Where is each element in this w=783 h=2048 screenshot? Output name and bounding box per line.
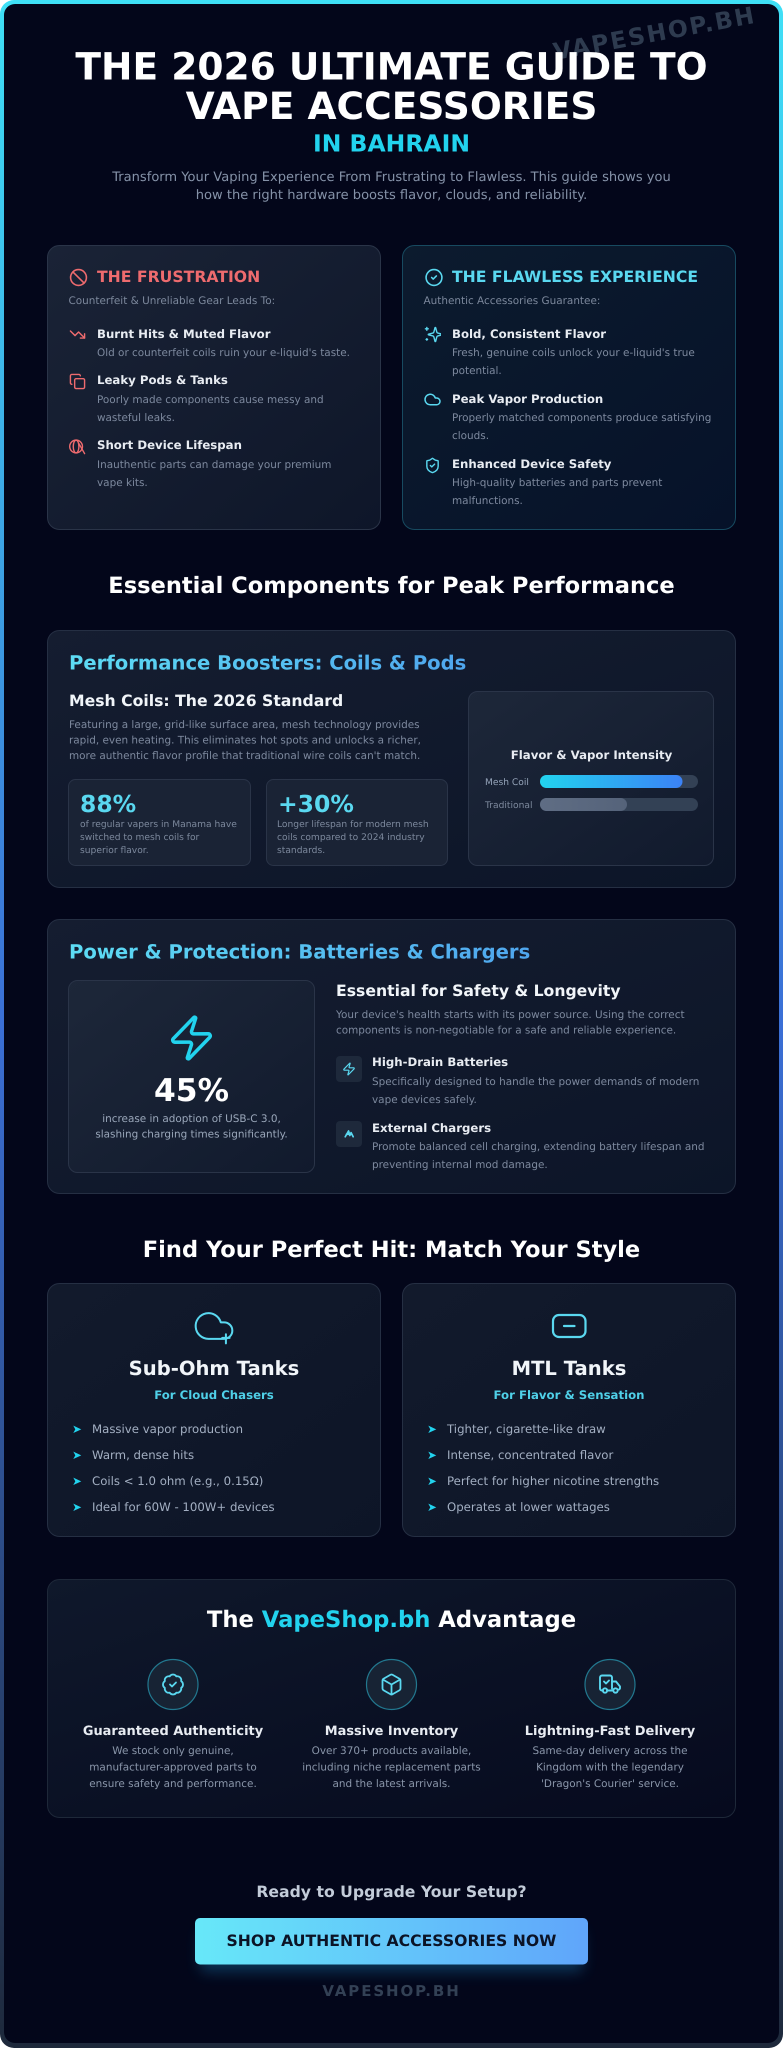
- feature list: ➤: [72, 1500, 82, 1514]
- feature: high-drain batteries: vape devices safely.: [372, 1094, 477, 1106]
- item: device safety: [427, 457, 662, 507]
- feature: external chargers: Promote balanced cell charging, extending battery lifespan and: [372, 1141, 704, 1153]
- feature list: Massive vapor production: [92, 1422, 243, 1436]
- heading: match your style: Find Your Perfect Hit: Match Your Style: [143, 1237, 640, 1263]
- feature: external chargers: preventing internal mod damage.: [372, 1159, 548, 1171]
- panel: power and protection: [48, 920, 736, 1194]
- heading: the frustration: THE FRUSTRATION: [97, 267, 260, 286]
- lead-in text: Counterfeit & Unreliable Gear Leads To:: [68, 295, 275, 307]
- panel: mtl tanks: For Flavor & Sensation: [493, 1388, 645, 1402]
- feature list: ➤: [427, 1500, 437, 1514]
- advantage: inventory: Over 370+ products available,: [312, 1745, 471, 1757]
- item: bold flavor: Bold, Consistent Flavor: [452, 327, 606, 341]
- item: burnt hits: Burnt Hits & Muted Flavor: [97, 327, 271, 341]
- item: leaky pods: Poorly made components cause messy and: [97, 394, 324, 406]
- icon: cloud: [194, 1312, 234, 1344]
- bar: mesh coil: [485, 775, 698, 788]
- advantage: authenticity: Guaranteed Authenticity: [83, 1724, 264, 1739]
- footer brand: VAPESHOP.BH: [322, 1982, 461, 2000]
- stat card: +30%: standards.: [277, 846, 325, 856]
- stat card: +30%: +30%: [278, 790, 354, 818]
- stat card: 88%: of regular vapers in Manama have: [80, 820, 237, 830]
- feature: external chargers: External Chargers: [372, 1121, 491, 1135]
- panel: performance boosters: [48, 630, 736, 888]
- body text: rapid, even heating. This eliminates hot spots and unlocks a richer,: [69, 734, 421, 746]
- item: bold flavor: Fresh, genuine coils unlock your e-liquid's true: [452, 347, 695, 359]
- item: device safety: High-quality batteries and parts prevent: [452, 477, 662, 489]
- panel heading: Power & Protection: Batteries & Chargers: [69, 940, 530, 964]
- stat card: 88%: superior flavor.: [80, 846, 149, 856]
- bar: traditional: [484, 798, 698, 811]
- item: peak vapor: Properly matched components produce satisfying: [452, 412, 711, 424]
- feature: high-drain batteries: High-Drain Batteries: [372, 1055, 508, 1069]
- body text: Featuring a large, grid-like surface area, mesh technology provides: [69, 719, 420, 731]
- body text: more authentic flavor profile that traditional wire coils can't match.: [69, 750, 420, 762]
- advantage: inventory: including niche replacement parts: [302, 1762, 481, 1774]
- stat card: +30%: coils compared to 2024 industry: [277, 833, 425, 843]
- advantage: delivery: Kingdom with the legendary: [536, 1762, 684, 1774]
- bar chart: flavor and vapor intensity: [468, 692, 714, 866]
- panel: sub-ohm tanks: [48, 1284, 380, 1536]
- stat card: 45%: slashing charging times significantly.: [95, 1128, 288, 1140]
- item: device safety: Enhanced Device Safety: [452, 457, 612, 471]
- advantage: authenticity: manufacturer-approved parts to: [89, 1762, 257, 1774]
- watermark: VAPESHOP.BH: [551, 1, 758, 66]
- body text: Your device's health starts with its power source. Using the correct: [335, 1009, 685, 1021]
- cta prompt: Ready to Upgrade Your Setup?: [256, 1882, 527, 1901]
- item: burnt hits: [70, 327, 350, 359]
- advantage: delivery: 'Dragon's Courier' service.: [541, 1778, 679, 1790]
- advantage: inventory: [302, 1660, 481, 1790]
- item: peak vapor: clouds.: [452, 430, 489, 442]
- advantage: authenticity: We stock only genuine,: [112, 1745, 234, 1757]
- advantage: authenticity: ensure safety and performance.: [89, 1778, 257, 1790]
- feature list: [427, 1422, 659, 1514]
- call to action: [195, 1882, 588, 2000]
- panel: sub-ohm tanks: Sub-Ohm Tanks: [129, 1357, 299, 1380]
- stat card: 88%: switched to mesh coils for: [80, 833, 200, 843]
- button: SHOP AUTHENTIC ACCESSORIES NOW: [227, 1931, 556, 1950]
- item: leaky pods: [70, 373, 324, 424]
- feature list: ➤: [427, 1448, 437, 1462]
- bar: mesh coil: Mesh Coil: [485, 778, 529, 788]
- item: peak vapor: [425, 392, 711, 442]
- feature list: ➤: [427, 1422, 437, 1436]
- button: [195, 1918, 588, 1964]
- stat card: 45%: increase in adoption of USB-C 3.0,: [102, 1113, 281, 1125]
- item: device safety: malfunctions.: [452, 495, 523, 507]
- icon: ban: [70, 268, 88, 286]
- stat card: +30%: [266, 780, 448, 866]
- stat card: 45%: 45%: [154, 1073, 229, 1109]
- item: bold flavor: [425, 327, 695, 377]
- advantage: delivery: [525, 1660, 696, 1790]
- intro text: how the right hardware boosts flavor, clouds, and reliability.: [196, 188, 587, 203]
- feature list: ➤: [72, 1422, 82, 1436]
- subheading: safety and longevity: Essential for Safety & Longevity: [336, 981, 621, 1000]
- panel: the frustration: [48, 246, 380, 530]
- feature list: Tighter, cigarette-like draw: [446, 1422, 606, 1436]
- item: leaky pods: wasteful leaks.: [97, 412, 175, 424]
- feature list: Warm, dense hits: [92, 1448, 194, 1462]
- advantage: inventory: and the latest arrivals.: [333, 1778, 450, 1790]
- advantage: inventory: Massive Inventory: [325, 1724, 459, 1739]
- panel: mtl tanks: [402, 1284, 736, 1536]
- heading: The VapeShop.bh Advantage: [207, 1607, 576, 1633]
- advantage: delivery: Lightning-Fast Delivery: [525, 1724, 696, 1739]
- feature list: Coils < 1.0 ohm (e.g., 0.15Ω): [92, 1474, 263, 1488]
- body text: components is non-negotiable for a safe and reliable experience.: [336, 1024, 676, 1036]
- item: bold flavor: potential.: [452, 365, 502, 377]
- intro text: Transform Your Vaping Experience From Frustrating to Flawless. This guide shows you: [111, 170, 671, 185]
- button glow: [200, 1930, 583, 1972]
- subheading: mesh coils: Mesh Coils: The 2026 Standard: [69, 691, 343, 710]
- feature: high-drain batteries: [336, 1055, 699, 1106]
- item: short lifespan: Short Device Lifespan: [97, 438, 242, 452]
- title: VAPE ACCESSORIES: [186, 84, 597, 128]
- stat card: 88%: 88%: [80, 790, 136, 818]
- icon: lightning bolt: [170, 1015, 212, 1061]
- feature list: [72, 1422, 275, 1514]
- item: short lifespan: [70, 438, 331, 489]
- panel: vapeshop advantage: [48, 1580, 736, 1818]
- lead-in text: Authentic Accessories Guarantee:: [424, 295, 600, 307]
- feature list: Intense, concentrated flavor: [447, 1448, 613, 1462]
- panel: sub-ohm tanks: For Cloud Chasers: [154, 1388, 274, 1402]
- heading: essential components: Essential Components for Peak Performance: [108, 573, 675, 599]
- feature list: ➤: [72, 1448, 82, 1462]
- panel: the flawless experience: [402, 246, 736, 530]
- feature list: ➤: [72, 1474, 82, 1488]
- icon: check circle: [425, 268, 443, 286]
- icon: rounded slot: [553, 1315, 586, 1337]
- subtitle location: IN BAHRAIN: [313, 130, 470, 158]
- bar: traditional: Traditional: [484, 801, 533, 811]
- feature list: Operates at lower wattages: [447, 1500, 610, 1514]
- feature list: Ideal for 60W - 100W+ devices: [92, 1500, 275, 1514]
- panel: mtl tanks: MTL Tanks: [512, 1357, 626, 1380]
- panel heading: Performance Boosters: Coils & Pods: [69, 652, 466, 674]
- stat card: 88%: [68, 780, 250, 866]
- item: short lifespan: Inauthentic parts can damage your premium: [97, 459, 331, 471]
- item: peak vapor: Peak Vapor Production: [452, 392, 603, 406]
- header: [75, 44, 708, 203]
- item: burnt hits: Old or counterfeit coils ruin your e-liquid's taste.: [97, 347, 350, 359]
- feature list: Perfect for higher nicotine strengths: [447, 1474, 659, 1488]
- title: THE 2026 ULTIMATE GUIDE TO: [75, 44, 708, 88]
- advantage: authenticity: [83, 1660, 264, 1790]
- stat card: +30%: Longer lifespan for modern mesh: [277, 820, 429, 830]
- bar chart: flavor and vapor intensity: Flavor & Vapor Intensity: [511, 748, 673, 762]
- feature list: ➤: [427, 1474, 437, 1488]
- stat card: 45%: [68, 980, 314, 1172]
- item: leaky pods: Leaky Pods & Tanks: [97, 373, 228, 387]
- heading: flawless experience: THE FLAWLESS EXPERIENCE: [452, 267, 698, 286]
- advantage: delivery: Same-day delivery across the: [532, 1745, 688, 1757]
- feature: high-drain batteries: Specifically designed to handle the power demands of modern: [372, 1076, 699, 1088]
- feature: external chargers: [336, 1121, 704, 1171]
- item: short lifespan: vape kits.: [97, 477, 148, 489]
